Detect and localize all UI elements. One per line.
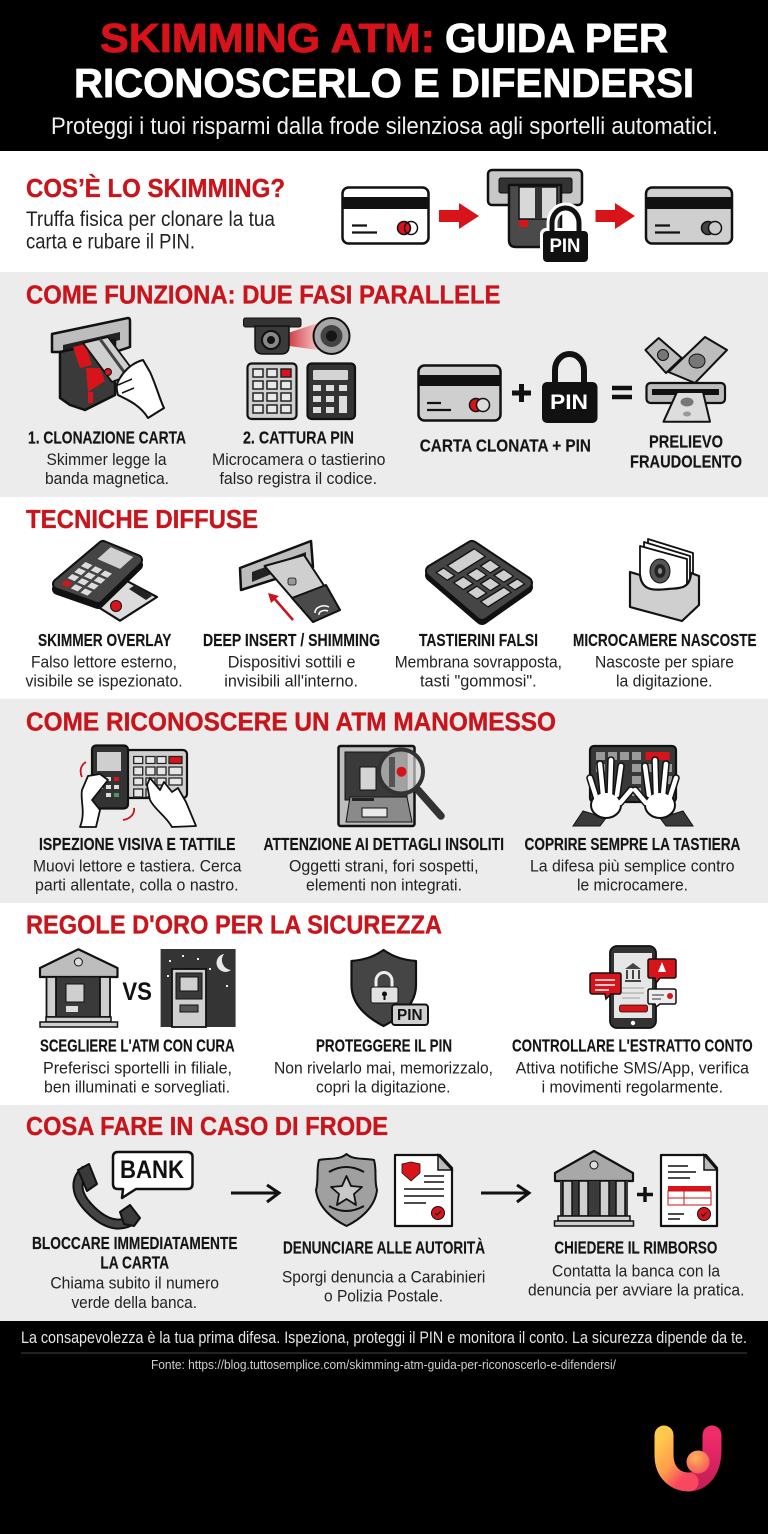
panel: come riconoscere un atm manomesso — [0, 699, 768, 903]
icon: grey card — [418, 366, 500, 420]
panel: come funziona — [0, 272, 768, 497]
text block: estratto conto — [512, 1036, 753, 1097]
panel: tecniche diffuse — [0, 497, 768, 699]
panel: regole d'oro — [0, 903, 768, 1105]
text block: dettagli insoliti: ATTENZIONE AI DETTAGLI INSOLITI — [264, 834, 504, 854]
text block: definition — [26, 208, 275, 254]
source line: Fonte: https://blog.tuttosemplice.com/skimming-atm-guida-per-riconoscerlo-e-difendersi/ — [151, 1357, 616, 1372]
text block: skimmer overlay: Falso lettore esterno, — [31, 653, 177, 672]
arrow — [439, 203, 479, 229]
heading: TECNICHE DIFFUSE — [26, 506, 258, 534]
heading: COSA FARE IN CASO DI FRODE — [26, 1113, 388, 1141]
text block: scegliere atm: ben illuminati e sorvegliati. — [44, 1078, 230, 1097]
text block: denunciare: Sporgi denuncia a Carabinieri — [282, 1267, 485, 1286]
icon: pin shield: PIN — [397, 1007, 422, 1024]
arrow — [596, 203, 635, 229]
icon: cloned grey card — [646, 188, 732, 244]
icon: pin padlock — [542, 354, 598, 423]
icon: atm under magnifying glass — [338, 746, 441, 826]
label: carta clonata + pin: CARTA CLONATA + PIN — [420, 436, 591, 456]
icon: deep insert shimmer — [240, 541, 340, 622]
icon: skimmer on atm with pin padlock — [488, 170, 591, 265]
text block: skimmer overlay — [26, 630, 183, 691]
logo — [664, 1435, 712, 1482]
plus sign — [637, 1187, 653, 1202]
icon: pos overlay skimmer — [58, 545, 157, 621]
text block: proteggere pin — [274, 1036, 493, 1097]
text block: tastierini falsi: Membrana sovrapposta, — [395, 653, 562, 672]
text block: coprire tastiera: La difesa più semplice contro — [530, 857, 735, 876]
panel: header — [0, 0, 768, 151]
text block: deep insert — [203, 630, 380, 691]
icon: fake keypad — [432, 547, 526, 618]
arrow — [231, 1185, 279, 1202]
text block: step 2: 2. CATTURA PIN — [243, 428, 354, 448]
text block: ispezione: parti allentate, colla o nastro. — [35, 876, 238, 895]
equals sign — [612, 388, 632, 397]
text block: microcamere — [573, 630, 757, 691]
icon: cash dispenser with banknotes — [645, 337, 727, 422]
text block: coprire tastiera — [524, 834, 741, 895]
text block: scegliere atm — [40, 1036, 235, 1097]
icon: phone handset with bank bubble — [78, 1152, 192, 1226]
text block: ispezione: Muovi lettore e tastiera. Cerca — [33, 857, 242, 876]
icon: skimmer on atm with pin padlock: PIN — [550, 236, 580, 257]
text block: bloccare carta: LA CARTA — [100, 1252, 169, 1272]
text block: denunciare: o Polizia Postale. — [324, 1287, 443, 1306]
text block: deep insert: DEEP INSERT / SHIMMING — [203, 630, 380, 650]
panel: cosa fare in caso di frode — [0, 1105, 768, 1321]
text block: bloccare carta: Chiama subito il numero — [50, 1273, 219, 1292]
label: prelievo fraudolento: FRAUDOLENTO — [630, 452, 742, 472]
icon: pin padlock: PIN — [550, 391, 588, 414]
text block: step 2: falso registra il codice. — [220, 469, 377, 488]
text block: proteggere pin: copri la digitazione. — [316, 1078, 450, 1097]
text block: coprire tastiera: le microcamere. — [577, 876, 688, 895]
text block: estratto conto: Attiva notifiche SMS/App, verifica — [516, 1058, 750, 1077]
text block: deep insert: invisibili all'interno. — [224, 672, 358, 691]
text block: rimborso: Contatta la banca con la — [552, 1262, 720, 1281]
text block: tastierini falsi: tasti "gommosi". — [420, 672, 537, 691]
text block: dettagli insoliti — [264, 834, 504, 895]
heading: COME RICONOSCERE UN ATM MANOMESSO — [26, 709, 556, 737]
text block: step 2 — [212, 428, 386, 488]
text block: rimborso: CHIEDERE IL RIMBORSO — [554, 1237, 717, 1257]
text block: bloccare carta — [32, 1233, 238, 1312]
text block: step 1: Skimmer legge la — [46, 450, 167, 469]
label: prelievo fraudolento: PRELIEVO — [649, 431, 723, 451]
text block: rimborso: denuncia per avviare la pratica. — [528, 1281, 744, 1300]
text block: step 1 — [28, 428, 186, 488]
panel: footer — [0, 1321, 768, 1534]
text block: skimmer overlay: visibile se ispezionato. — [26, 672, 183, 691]
text block: rimborso — [528, 1237, 744, 1300]
title: RICONOSCERLO E DIFENDERSI — [74, 60, 694, 106]
icon: bank branch atm — [40, 949, 118, 1027]
text block: skimmer overlay: SKIMMER OVERLAY — [38, 630, 172, 650]
arrow — [481, 1185, 529, 1202]
text block: step 1: 1. CLONAZIONE CARTA — [28, 428, 186, 448]
text block: denunciare: DENUNCIARE ALLE AUTORITÀ — [283, 1236, 485, 1257]
icon: refund document — [661, 1155, 717, 1226]
text block: dettagli insoliti: elementi non integrati. — [306, 876, 462, 895]
text block: proteggere pin: Non rivelarlo mai, memorizzalo, — [274, 1058, 493, 1077]
icon: hidden microcamera in brochure holder — [630, 539, 699, 621]
text block: deep insert: Dispositivi sottili e — [228, 653, 356, 672]
icon: police badge — [316, 1154, 377, 1226]
text block: estratto conto: i movimenti regolarmente. — [542, 1078, 723, 1097]
text block: scegliere atm: Preferisci sportelli in filiale, — [43, 1058, 232, 1077]
panel: cos'è lo skimming — [0, 151, 768, 272]
icon: hands inspecting reader and keypad — [80, 746, 196, 827]
title: SKIMMING ATM: — [100, 15, 435, 61]
text block: tastierini falsi: TASTIERINI FALSI — [419, 630, 538, 650]
icon: police report document — [395, 1155, 452, 1226]
icon: phone handset with bank bubble: BANK — [120, 1156, 184, 1184]
text block: ispezione: ISPEZIONE VISIVA E TATTILE — [39, 834, 236, 854]
text block: proteggere pin: PROTEGGERE IL PIN — [316, 1036, 452, 1056]
vs label: VS — [122, 978, 152, 1006]
icon: pin shield — [352, 950, 428, 1026]
icon: white card — [342, 188, 428, 244]
text block: dettagli insoliti: Oggetti strani, fori sospetti, — [289, 857, 478, 876]
icon: bank — [554, 1151, 634, 1226]
title — [74, 15, 694, 106]
text block: bloccare carta: verde della banca. — [72, 1293, 197, 1312]
subtitle: Proteggi i tuoi risparmi dalla frode silenziosa agli sportelli automatici. — [51, 113, 718, 140]
icon: hidden camera and keypads — [244, 318, 355, 419]
icon: isolated atm at night — [161, 949, 236, 1027]
text block: definition: carta e rubare il PIN. — [26, 230, 195, 254]
text block: microcamere: Nascoste per spiare — [595, 653, 734, 672]
plus sign — [512, 384, 531, 402]
heading: COME FUNZIONA: DUE FASI PARALLELE — [26, 282, 500, 310]
text block: tastierini falsi — [395, 630, 562, 691]
heading: COS’È LO SKIMMING? — [26, 174, 285, 203]
text block: microcamere: la digitazione. — [616, 672, 712, 691]
label: prelievo fraudolento — [630, 431, 742, 472]
text block: bloccare carta: BLOCCARE IMMEDIATAMENTE — [32, 1233, 238, 1253]
icon: phone with notifications — [590, 946, 676, 1028]
icon: card skimmer slot with hand — [52, 318, 164, 418]
text block: step 2: Microcamera o tastierino — [212, 450, 386, 469]
heading: REGOLE D'ORO PER LA SICUREZZA — [26, 911, 442, 939]
icon: hands covering keyboard — [573, 746, 693, 826]
title: GUIDA PER — [445, 15, 668, 61]
text block: denunciare — [282, 1236, 485, 1306]
text block: ispezione — [33, 834, 242, 895]
text block: scegliere atm: SCEGLIERE L'ATM CON CURA — [40, 1036, 235, 1056]
text block: step 1: banda magnetica. — [45, 469, 169, 488]
text block: definition: Truffa fisica per clonare la tua — [26, 208, 275, 231]
